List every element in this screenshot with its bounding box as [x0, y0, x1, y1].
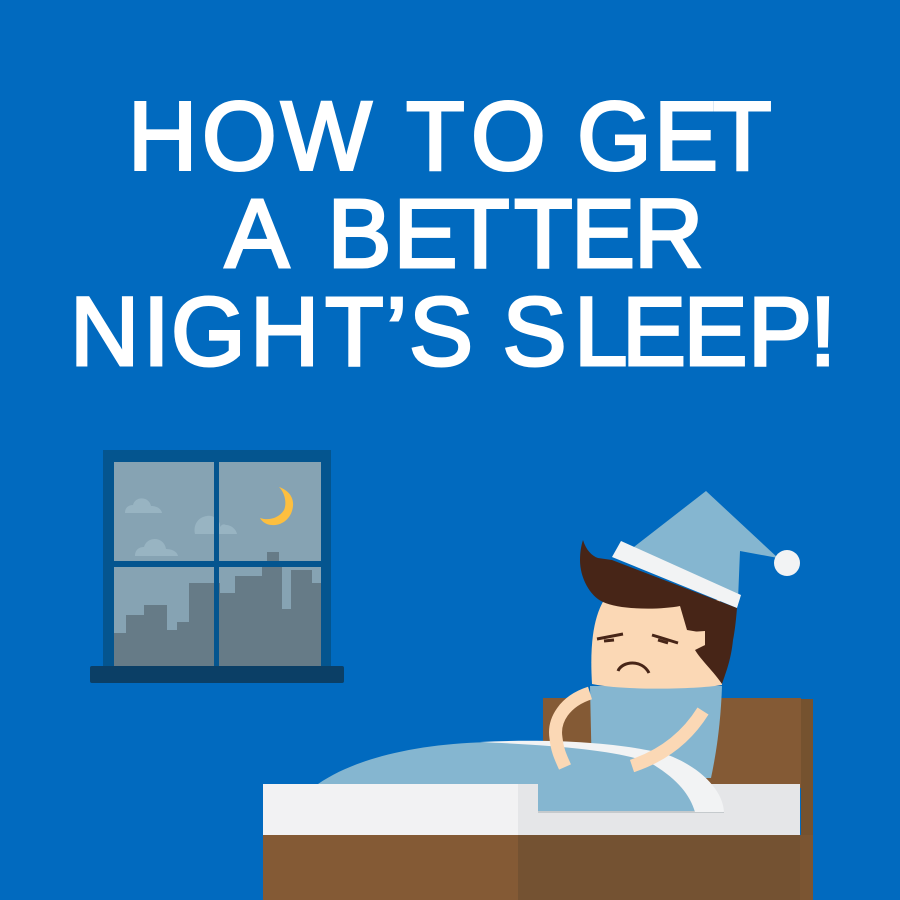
bed base	[263, 835, 813, 900]
fold shadow	[538, 811, 724, 813]
crescent moon	[260, 487, 293, 525]
man's torso	[590, 686, 722, 778]
city skyline	[114, 552, 321, 666]
window sill	[90, 666, 344, 683]
headboard	[543, 698, 813, 900]
window mullions	[214, 462, 219, 666]
arms	[556, 693, 703, 767]
hat brim	[612, 541, 741, 608]
face	[591, 600, 722, 689]
blanket fold	[520, 742, 696, 811]
bed and sleepy man	[263, 491, 813, 900]
eyes	[597, 634, 678, 643]
title: A BETTER	[225, 178, 703, 288]
man's head	[580, 540, 737, 689]
hair	[580, 540, 737, 684]
title: HOW TO GET	[128, 81, 772, 191]
title: NIGHT’S SLEEP!	[70, 276, 836, 386]
night sky	[114, 462, 321, 666]
mattress	[263, 784, 800, 835]
hat body	[630, 491, 778, 600]
window frame	[103, 450, 331, 670]
clouds	[125, 498, 237, 556]
window illustration	[90, 450, 344, 683]
pom-pom	[774, 550, 800, 576]
nightcap	[612, 491, 800, 608]
ear	[690, 631, 705, 649]
blanket back	[318, 742, 660, 790]
title	[70, 81, 836, 386]
blanket white edge	[480, 741, 724, 812]
frown	[618, 663, 649, 673]
